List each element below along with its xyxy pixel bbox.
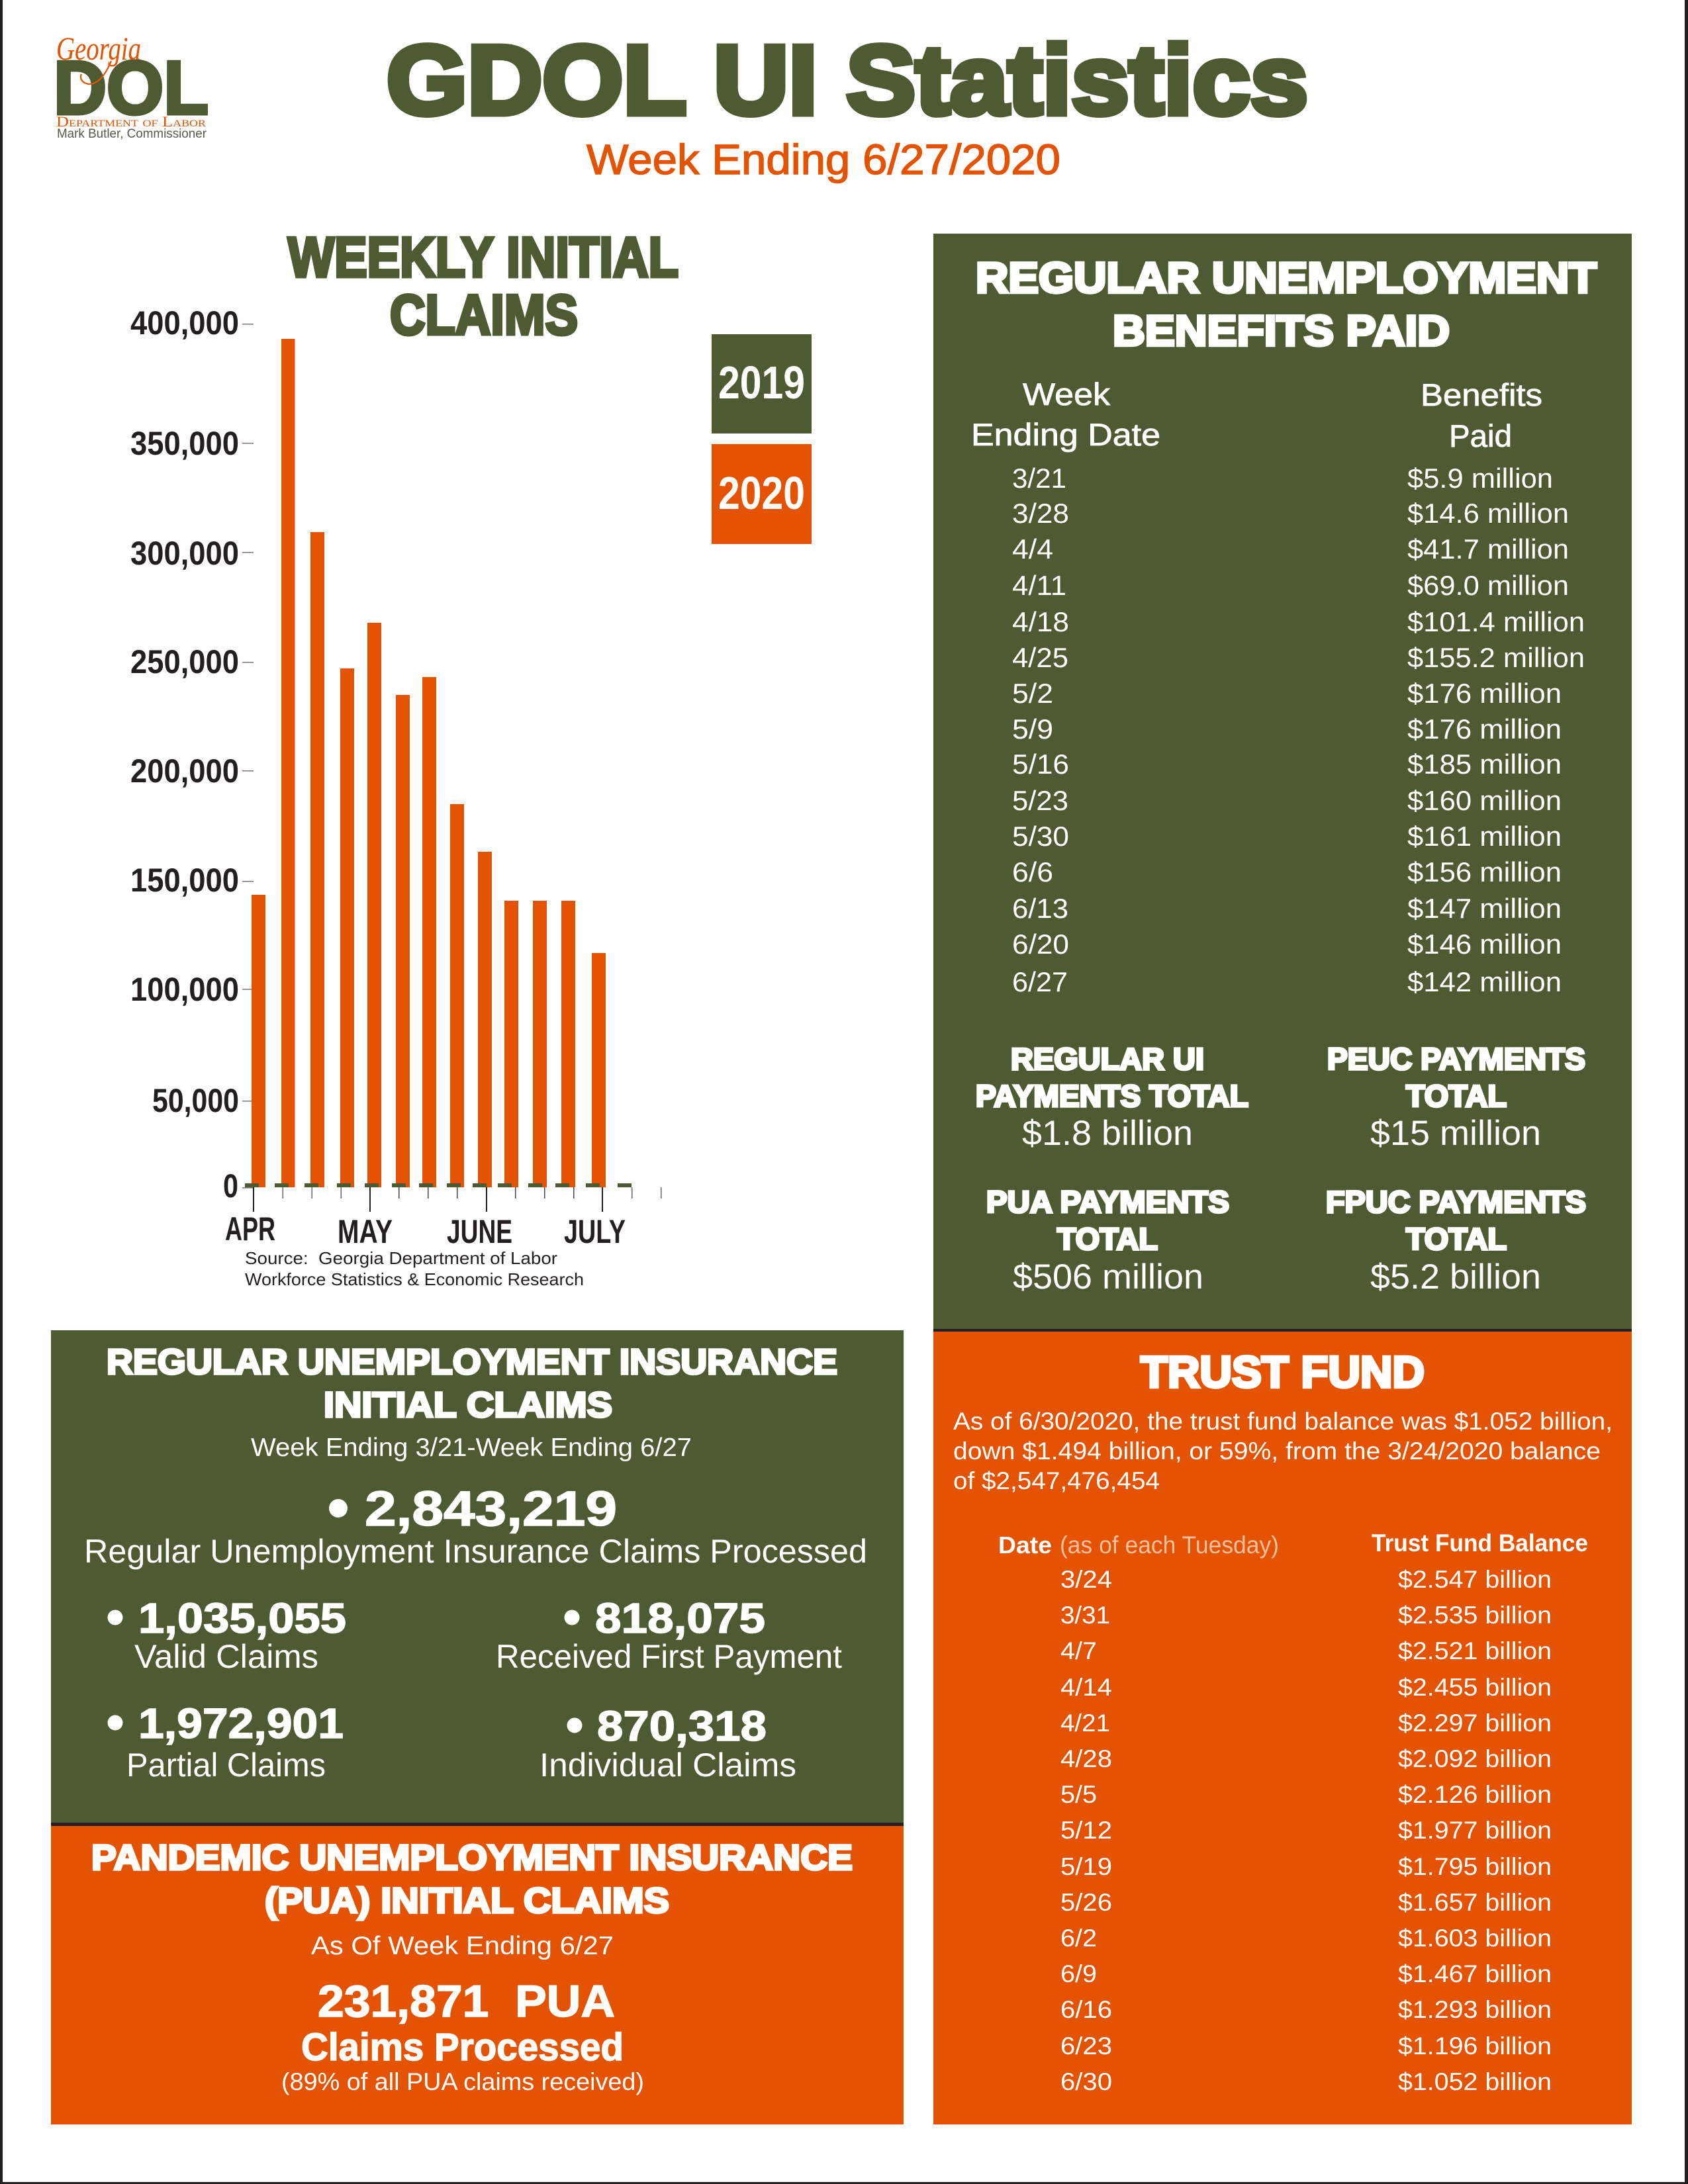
table: week ending dates: 4/4	[1012, 533, 1053, 565]
note: share of claims received: (89% of all PUA claims received)	[281, 2068, 644, 2095]
text block: balance summary: As of 6/30/2020, the trust fund balance was $1.052 billion,	[953, 1407, 1613, 1435]
y axis labels and ticks: 50,000	[152, 1082, 239, 1119]
table header: benefits paid: Benefits	[1421, 377, 1542, 412]
legend item: 2020	[712, 444, 812, 544]
table: week ending dates: 6/20	[1012, 929, 1069, 960]
table: benefits paid values: $14.6 million	[1407, 498, 1569, 529]
stat: partial claims: Partial Claims	[126, 1747, 326, 1784]
stat label: claims processed: Claims Processed	[301, 2026, 624, 2069]
heading: INITIAL CLAIMS	[324, 1385, 612, 1425]
table: dates: 6/2	[1060, 1925, 1097, 1952]
stat: PEUC payments total: PEUC PAYMENTS	[1327, 1042, 1585, 1076]
stat: PUA claims: 231,871 PUA	[318, 1976, 615, 2026]
table: benefits paid values: $155.2 million	[1407, 642, 1585, 673]
title: GDOL UI Statistics	[387, 26, 1308, 135]
date range: Week Ending 3/21-Week Ending 6/27	[251, 1433, 692, 1462]
table: week ending dates: 3/21	[1012, 463, 1066, 494]
stat: claims processed	[84, 1481, 867, 1570]
logo: Georgia DOL: Department of Labor	[56, 113, 206, 130]
heading: PANDEMIC UNEMPLOYMENT INSURANCE	[91, 1838, 853, 1878]
table header: benefits paid: Paid	[1449, 418, 1512, 453]
legend item: 2019: 2019	[718, 357, 805, 408]
table: benefits paid values: $101.4 million	[1407, 606, 1585, 637]
table: week ending dates: 6/27	[1012, 966, 1068, 997]
table: balances: $1.795 billion	[1398, 1853, 1552, 1880]
table: dates: 5/12	[1060, 1817, 1112, 1844]
table: dates: 6/16	[1060, 1996, 1112, 2023]
chart source note: Workforce Statistics & Economic Research	[245, 1269, 584, 1289]
stat: individual claims: Individual Claims	[539, 1747, 796, 1784]
table: week ending dates: 4/18	[1012, 606, 1069, 637]
chart source note: Source: Georgia Department of Labor	[245, 1248, 557, 1268]
table header: week ending date: Week	[1023, 377, 1111, 412]
table: week ending dates: 4/11	[1012, 570, 1066, 601]
y axis labels and ticks: 0	[223, 1167, 238, 1205]
y axis labels and ticks: 100,000	[130, 971, 239, 1008]
logo: Georgia DOL: Georgia	[56, 30, 141, 67]
stat: PUA payments total: TOTAL	[1057, 1222, 1158, 1256]
text block: balance summary	[953, 1407, 1613, 1494]
stat: valid claims	[107, 1594, 346, 1675]
table header: date: Date	[998, 1531, 1052, 1559]
heading	[91, 1838, 853, 1921]
stat: received first payment: Received First Payment	[496, 1638, 842, 1675]
stat: PEUC payments total: TOTAL	[1406, 1079, 1507, 1113]
table: week ending dates: 4/25	[1012, 642, 1068, 673]
heading: BENEFITS PAID	[1113, 306, 1450, 355]
legend item: 2019	[712, 334, 812, 433]
stat: valid claims: 1,035,055	[138, 1594, 346, 1642]
table: dates: 6/9	[1060, 1960, 1097, 1987]
table: benefits paid values: $185 million	[1407, 749, 1562, 780]
stat: regular UI payments total: $1.8 billion	[1022, 1114, 1193, 1153]
heading: REGULAR UNEMPLOYMENT INSURANCE	[107, 1342, 837, 1382]
table: balances: $1.467 billion	[1398, 1960, 1552, 1987]
2019 bars	[245, 1183, 632, 1187]
table: week ending dates: 5/16	[1012, 749, 1069, 780]
panel: regular unemployment insurance initial claims	[51, 1330, 904, 1823]
table: dates: 4/21	[1060, 1709, 1110, 1737]
stat: FPUC payments total: FPUC PAYMENTS	[1326, 1185, 1586, 1219]
x axis month labels	[225, 1210, 626, 1250]
chart heading: weekly initial claims	[288, 226, 679, 347]
table: benefits paid values: $161 million	[1407, 821, 1562, 852]
table: benefits paid values: $176 million	[1407, 713, 1562, 745]
table: balances: $2.455 billion	[1398, 1674, 1552, 1701]
table: week ending dates: 5/23	[1012, 785, 1068, 816]
table: balances: $2.092 billion	[1398, 1745, 1552, 1772]
table: balances: $1.196 billion	[1398, 2032, 1552, 2060]
table: benefits paid values: $156 million	[1407, 856, 1562, 887]
stat: claims processed: Regular Unemployment Insurance Claims Processed	[84, 1533, 867, 1570]
table: balances: $1.052 billion	[1398, 2068, 1552, 2095]
table: dates: 6/23	[1060, 2032, 1112, 2060]
stat: PEUC payments total	[1327, 1042, 1585, 1153]
table: balances: $1.293 billion	[1398, 1996, 1552, 2023]
table: dates: 5/5	[1060, 1781, 1097, 1808]
table: balances: $1.977 billion	[1398, 1817, 1552, 1844]
table: week ending dates: 5/2	[1012, 678, 1053, 709]
table: week ending dates: 5/30	[1012, 821, 1069, 852]
table: benefits paid values: $142 million	[1407, 966, 1562, 997]
heading	[976, 253, 1597, 355]
stat: FPUC payments total: TOTAL	[1406, 1222, 1507, 1256]
table header: date: (as of each Tuesday)	[1060, 1531, 1279, 1559]
x axis ticks	[253, 1187, 662, 1212]
date note: As Of Week Ending 6/27	[311, 1932, 614, 1960]
table: balances: $2.547 billion	[1398, 1566, 1552, 1593]
table: dates: 6/30	[1060, 2068, 1112, 2095]
heading: (PUA) INITIAL CLAIMS	[265, 1881, 669, 1921]
x axis month labels: APR	[225, 1210, 275, 1248]
2020 bars	[252, 339, 606, 1187]
y axis labels and ticks: 150,000	[130, 862, 239, 899]
table: balances: $1.603 billion	[1398, 1925, 1552, 1952]
legend	[712, 334, 812, 544]
table: week ending dates: 6/6	[1012, 856, 1053, 887]
table: week ending dates	[1012, 463, 1069, 997]
stat: regular UI payments total: PAYMENTS TOTAL	[976, 1079, 1248, 1113]
stat: claims processed: 2,843,219	[365, 1481, 617, 1536]
table: dates: 5/26	[1060, 1889, 1112, 1916]
table header: week ending date	[971, 377, 1160, 452]
table: benefits paid values: $176 million	[1407, 678, 1562, 709]
table header: week ending date: Ending Date	[971, 417, 1160, 452]
table: balances: $2.297 billion	[1398, 1709, 1552, 1737]
stat: received first payment: 818,075	[595, 1594, 765, 1642]
table: dates: 3/24	[1060, 1566, 1112, 1593]
stat: FPUC payments total: $5.2 billion	[1370, 1257, 1541, 1297]
y axis labels and ticks: 250,000	[130, 643, 239, 680]
table: week ending dates: 5/9	[1012, 713, 1053, 745]
panel: trust fund	[933, 1332, 1632, 2124]
table header: benefits paid	[1421, 377, 1542, 453]
table: benefits paid values: $147 million	[1407, 893, 1562, 924]
bar chart: weekly initial claims	[130, 304, 662, 1250]
heading: TRUST FUND	[1141, 1347, 1425, 1397]
text block: balance summary: of $2,547,476,454	[953, 1467, 1160, 1494]
table: balances: $1.657 billion	[1398, 1889, 1552, 1916]
table: week ending dates: 6/13	[1012, 893, 1068, 924]
stat: individual claims	[539, 1702, 796, 1784]
table: benefits paid values: $146 million	[1407, 929, 1562, 960]
y axis labels and ticks	[130, 304, 254, 1205]
stat: FPUC payments total	[1326, 1185, 1586, 1297]
panel: pandemic unemployment insurance initial claims	[51, 1826, 904, 2124]
table: benefits paid values	[1407, 463, 1585, 997]
stat: regular UI payments total	[976, 1042, 1248, 1153]
table: dates: 4/7	[1060, 1637, 1097, 1664]
chart heading: weekly initial claims: CLAIMS	[390, 284, 578, 347]
table: balances: $2.535 billion	[1398, 1602, 1552, 1629]
table: balances: $2.521 billion	[1398, 1637, 1552, 1664]
table: benefits paid values: $5.9 million	[1407, 463, 1553, 494]
stat: PUA payments total	[986, 1185, 1229, 1297]
stat: PUA payments total: PUA PAYMENTS	[986, 1185, 1229, 1219]
heading	[107, 1342, 837, 1425]
table: dates: 5/19	[1060, 1853, 1112, 1880]
stat: individual claims: 870,318	[597, 1702, 767, 1750]
table: benefits paid values: $41.7 million	[1407, 533, 1569, 565]
table: dates: 4/28	[1060, 1745, 1112, 1772]
table: balances	[1398, 1566, 1552, 2095]
table: benefits paid values: $69.0 million	[1407, 570, 1569, 601]
y axis labels and ticks: 400,000	[130, 304, 239, 341]
y axis labels and ticks: 350,000	[130, 425, 239, 462]
stat: received first payment	[496, 1594, 842, 1675]
table: dates	[1060, 1566, 1112, 2095]
logo: Georgia DOL: DOL	[54, 46, 209, 130]
subtitle: week ending date: Week Ending 6/27/2020	[586, 136, 1060, 183]
x axis month labels: JULY	[564, 1213, 626, 1250]
x axis month labels: JUNE	[447, 1213, 512, 1250]
legend item: 2020: 2020	[718, 467, 805, 519]
stat: PEUC payments total: $15 million	[1370, 1114, 1541, 1153]
chart heading: weekly initial claims: WEEKLY INITIAL	[288, 226, 679, 289]
heading: REGULAR UNEMPLOYMENT	[976, 253, 1597, 302]
y axis labels and ticks: 300,000	[130, 535, 239, 572]
text block: balance summary: down $1.494 billion, or 59%, from the 3/24/2020 balance	[953, 1437, 1601, 1465]
chart source note	[245, 1248, 584, 1289]
table: dates: 4/14	[1060, 1674, 1112, 1701]
panel: regular unemployment benefits paid	[933, 234, 1632, 1329]
table: benefits paid values: $160 million	[1407, 785, 1562, 816]
table: dates: 3/31	[1060, 1602, 1110, 1629]
table header: trust fund balance: Trust Fund Balance	[1372, 1529, 1588, 1557]
x axis month labels: MAY	[338, 1213, 393, 1250]
stat: partial claims: 1,972,901	[138, 1700, 344, 1747]
y axis labels and ticks: 200,000	[130, 752, 239, 790]
stat: regular UI payments total: REGULAR UI	[1011, 1042, 1204, 1076]
table: balances: $2.126 billion	[1398, 1781, 1552, 1808]
logo: Georgia DOL: Mark Butler, Commissioner	[57, 127, 207, 141]
stat: partial claims	[107, 1700, 344, 1784]
stat: valid claims: Valid Claims	[134, 1638, 318, 1675]
table: week ending dates: 3/28	[1012, 498, 1069, 529]
stat: PUA payments total: $506 million	[1013, 1257, 1203, 1297]
